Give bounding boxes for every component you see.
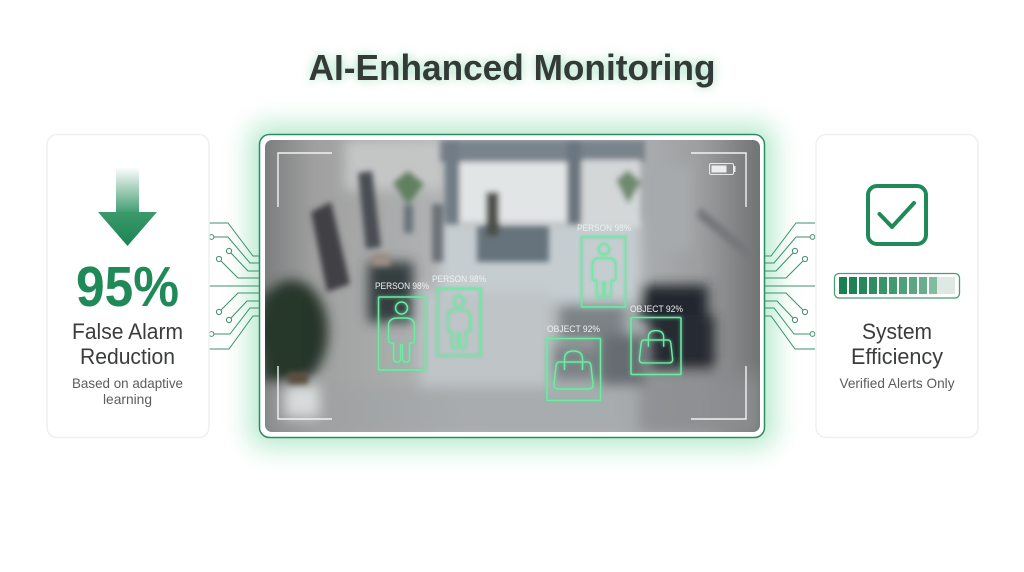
caption: adaptive learning: Based on adaptive [72, 375, 183, 391]
detection: person 3: PERSON 98% [577, 223, 631, 233]
stat: 95%: 95% [76, 255, 179, 319]
detection: object 1: OBJECT 92% [547, 324, 600, 334]
detection: person 1 [375, 281, 429, 370]
detection: person 2 [432, 274, 486, 356]
heading: false alarm reduction: Reduction [80, 344, 175, 369]
blurred lobby photo [256, 140, 760, 435]
heading: false alarm reduction: False Alarm [72, 319, 183, 344]
caption: verified alerts only: Verified Alerts Only [840, 375, 954, 391]
detection: person 3 [577, 223, 631, 307]
detection: object 2: OBJECT 92% [630, 304, 683, 314]
viewfinder corners [278, 153, 746, 419]
heading: system efficiency: System [862, 319, 932, 344]
heading: system efficiency [851, 319, 943, 369]
heading: false alarm reduction [72, 319, 183, 369]
title: AI-Enhanced Monitoring [308, 47, 716, 88]
detection: object 1 [547, 324, 600, 400]
panel: camera frame [256, 134, 764, 438]
title: AI-Enhanced Monitoring [308, 47, 716, 88]
progress bar [834, 274, 960, 298]
icon: checkbox [868, 186, 926, 244]
caption: adaptive learning [72, 375, 183, 407]
panel: false alarm reduction [47, 134, 209, 438]
panel: system efficiency [816, 134, 978, 438]
icon: battery [710, 164, 736, 174]
icon: down arrow [98, 167, 157, 246]
detection: object 2 [630, 304, 683, 374]
circuit traces: left [209, 223, 259, 349]
caption: adaptive learning: learning [103, 391, 152, 407]
detection: person 1: PERSON 98% [375, 281, 429, 291]
detection: person 2: PERSON 98% [432, 274, 486, 284]
heading: system efficiency: Efficiency [851, 344, 943, 369]
circuit traces: right [765, 223, 815, 349]
frame glow [250, 125, 774, 447]
